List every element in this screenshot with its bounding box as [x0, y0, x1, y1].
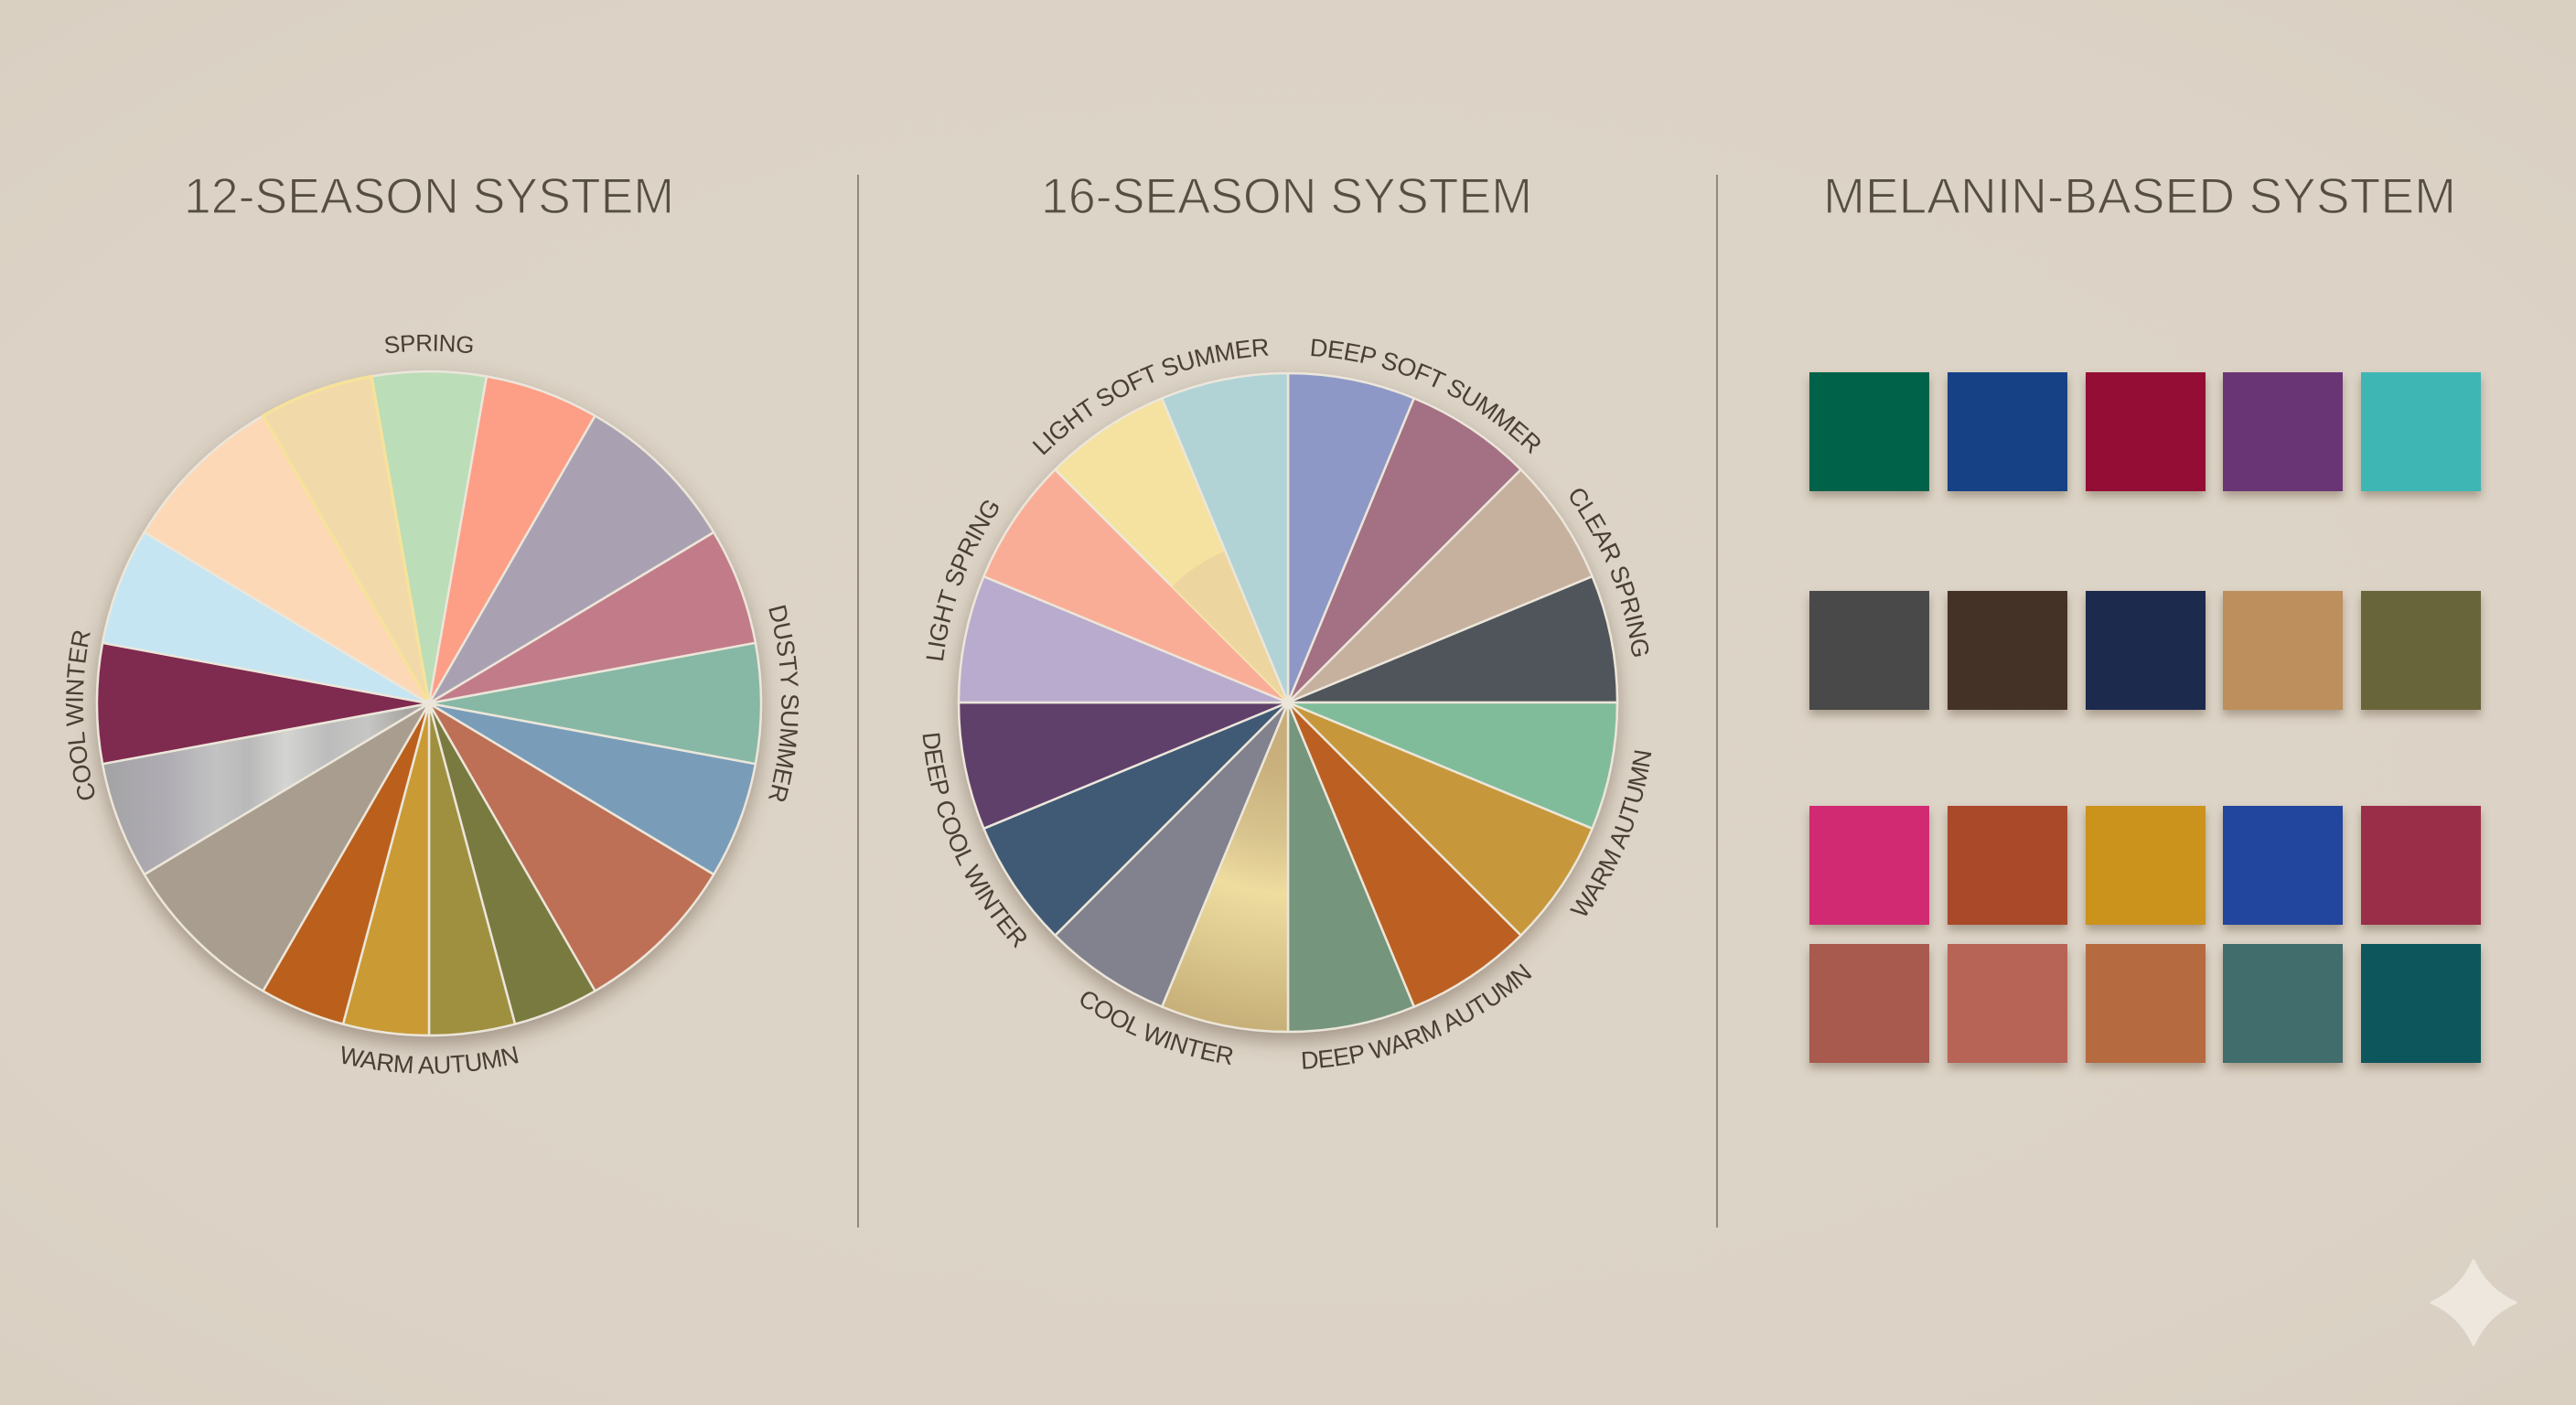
label: deep warm autumn: DEEP WARM AUTUMN [1303, 964, 1531, 1069]
swatch row 4 [1809, 944, 2481, 1063]
label: cool winter: COOL WINTER [1081, 992, 1233, 1065]
panel: 16-season system [922, 167, 1652, 1069]
label: cool winter: COOL WINTER [66, 631, 95, 799]
divider [857, 175, 859, 1228]
icon: four-point sparkle [2431, 1260, 2516, 1345]
label: light spring: LIGHT SPRING [926, 500, 999, 660]
divider [1716, 175, 1718, 1228]
title: 12-season system: 12-SEASON SYSTEM [184, 167, 674, 224]
label: light soft summer: LIGHT SOFT SUMMER [1032, 338, 1269, 456]
swatch row 2 [1809, 591, 2481, 710]
panel: melanin-based system [1809, 167, 2481, 1063]
title: 16-season system: 16-SEASON SYSTEM [1041, 167, 1532, 224]
swatch row 3 [1809, 806, 2481, 925]
pie chart: 16-season wheel [958, 372, 1618, 1033]
label: deep soft summer: DEEP SOFT SUMMER [1311, 338, 1540, 454]
label: dusty summer: DUSTY SUMMER [768, 606, 800, 801]
label: spring: SPRING [385, 335, 473, 353]
title: melanin-based system: MELANIN-BASED SYSTEM [1823, 167, 2456, 224]
label: warm autumn: WARM AUTUMN [342, 1046, 519, 1074]
swatch row 1 [1809, 372, 2481, 491]
label: clear spring: CLEAR SPRING [1570, 488, 1648, 657]
pie chart: 12-season wheel [96, 370, 762, 1036]
label: deep cool winter: DEEP COOL WINTER [922, 734, 1026, 949]
label: warm autumn: WARM AUTUMN [1570, 750, 1652, 916]
panel: 12-season system [66, 167, 800, 1074]
